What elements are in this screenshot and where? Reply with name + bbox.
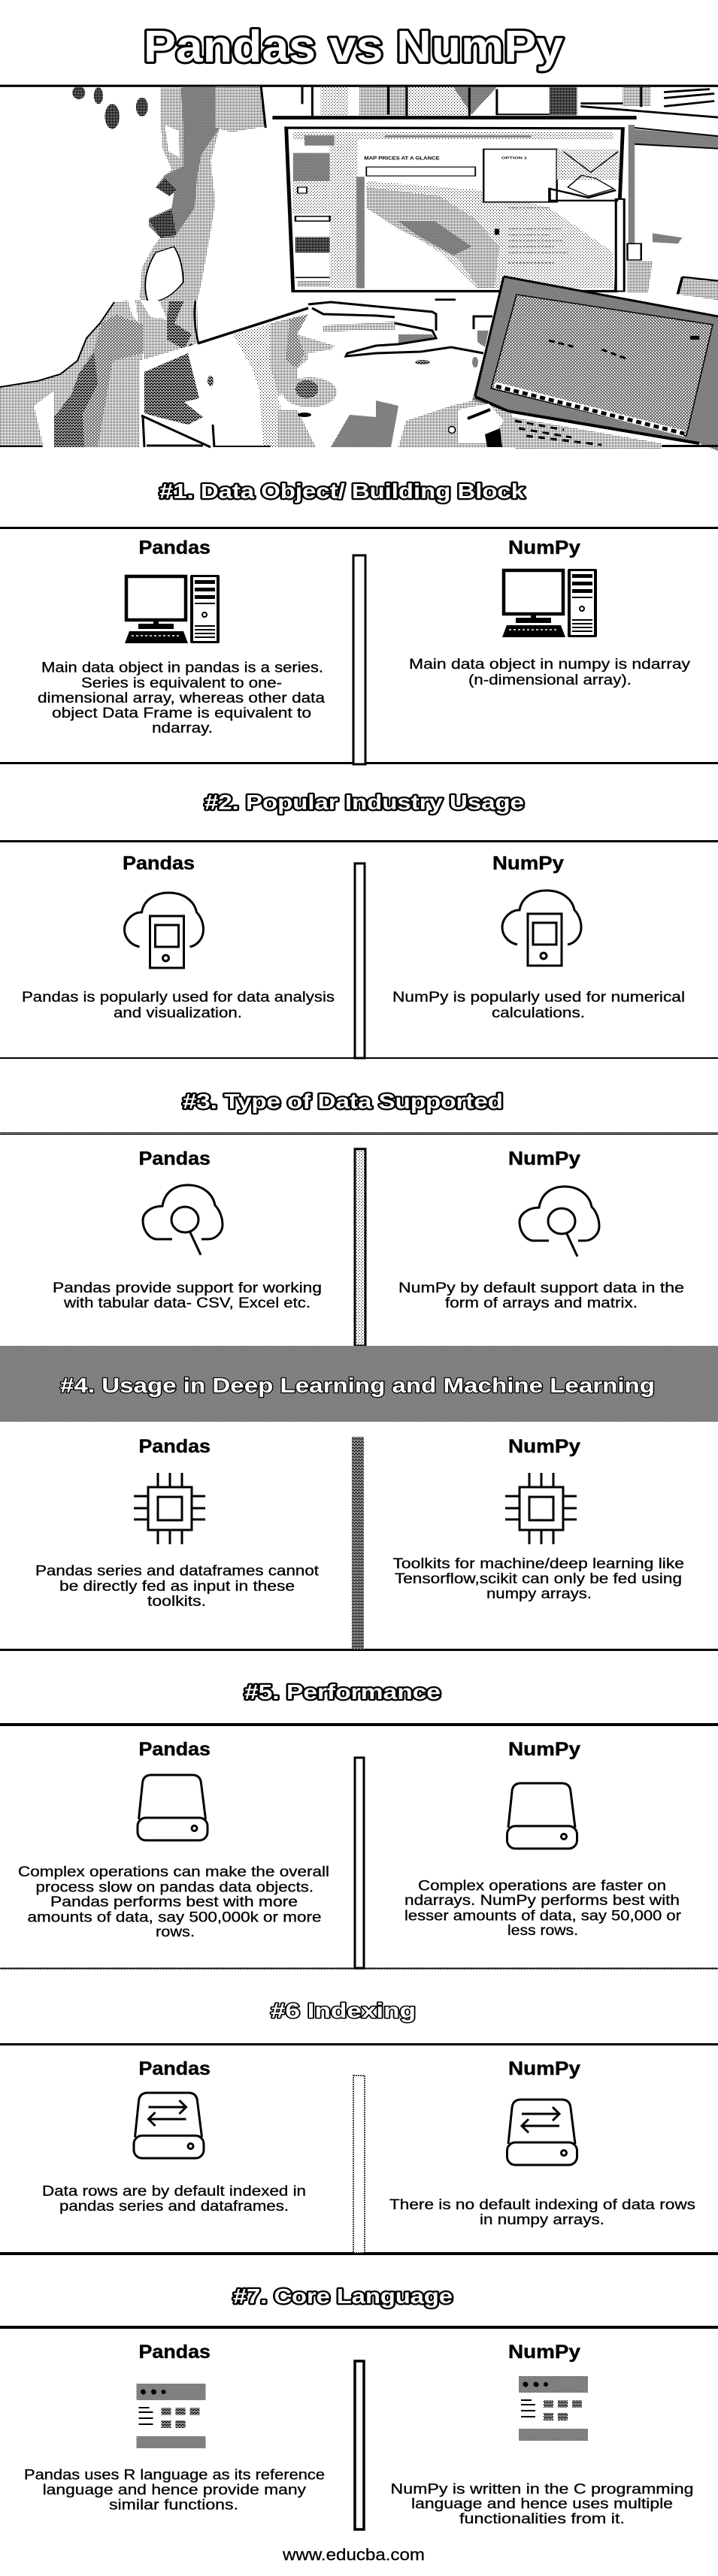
shelf items — [183, 86, 718, 132]
description: Series is equivalent to one- — [81, 676, 282, 691]
hand and keyboard — [0, 401, 718, 449]
description 7: Pandas uses R language as its reference — [24, 2467, 325, 2483]
description 2: and visualization. — [114, 1005, 242, 1021]
column: Pandas 6: Pandas — [138, 2058, 211, 2079]
icon: cloud phone — [125, 893, 203, 968]
column: NumPy 2 — [392, 853, 685, 1021]
column: NumPy 3: NumPy — [508, 1148, 580, 1169]
column: NumPy 5 — [404, 1739, 682, 1939]
description 7: language and hence provide many — [43, 2482, 307, 2498]
divider 3 — [355, 1149, 365, 1346]
photo lower half — [0, 277, 718, 451]
description: object Data Frame is equivalent to — [52, 706, 311, 721]
description 6 — [42, 2184, 306, 2215]
description 2 right: calculations. — [492, 1005, 585, 1021]
description 3 right: form of arrays and matrix. — [445, 1296, 638, 1311]
icon: computer — [125, 575, 220, 643]
column: NumPy 4 — [392, 1436, 684, 1602]
column: NumPy: NumPy — [508, 537, 580, 558]
monitor: MAP PRICES AT A GLANCE — [364, 156, 440, 161]
section 4: deep learning band and panel — [0, 1346, 718, 1651]
icon: drive right — [507, 1783, 577, 1849]
title: Pandas vs NumPy — [144, 22, 563, 71]
leaves — [72, 86, 148, 129]
description 2 — [22, 990, 335, 1021]
description 3 right: NumPy by default support data in the — [398, 1280, 684, 1296]
description 6 right — [389, 2197, 695, 2228]
section 7: core language — [0, 2284, 718, 2529]
column: Pandas 7 — [24, 2342, 325, 2513]
plant trunk — [140, 88, 220, 315]
section 3: type of data supported — [0, 1090, 718, 1346]
divider 7 — [355, 2361, 364, 2529]
column: NumPy 5: NumPy — [508, 1739, 580, 1760]
column: NumPy 6: NumPy — [508, 2058, 580, 2079]
description 7 right — [391, 2482, 693, 2527]
monitor: acer — [438, 300, 454, 305]
column: Pandas 3: Pandas — [138, 1148, 211, 1169]
icon: chip — [134, 1473, 205, 1544]
column: Pandas: Pandas — [138, 537, 211, 558]
description 4 right — [392, 1556, 684, 1602]
description 5 right: lesser amounts of data, say 50,000 or — [404, 1909, 682, 1924]
photo upper half — [0, 85, 718, 315]
icon: drive with arrows — [134, 2093, 204, 2158]
description 5 right: less rows. — [507, 1923, 578, 1939]
divider — [353, 555, 365, 764]
column: Pandas 2: Pandas — [123, 853, 195, 874]
heading 7: #7. Core Language — [233, 2284, 453, 2308]
description right: Main data object in numpy is ndarray — [409, 657, 691, 673]
description 7 right: language and hence uses multiple — [411, 2496, 673, 2512]
column: NumPy 3 — [398, 1148, 684, 1311]
description 6: pandas series and dataframes. — [59, 2199, 289, 2215]
divider 2 — [355, 863, 365, 1058]
icon: chip right — [505, 1473, 577, 1544]
column: NumPy 4: NumPy — [508, 1436, 580, 1457]
description 5: Pandas performs best with more — [50, 1894, 298, 1910]
description 3: with tabular data- CSV, Excel etc. — [63, 1296, 311, 1311]
footer url: www.educba.com — [282, 2545, 425, 2564]
description 5: Complex operations can make the overall — [18, 1864, 329, 1880]
section 2: popular industry usage — [0, 791, 718, 1059]
photo: desk with monitor and laptop — [0, 85, 718, 451]
column: Pandas 5: Pandas — [138, 1739, 211, 1760]
divider 6 — [353, 2076, 365, 2253]
description 3 — [53, 1280, 322, 1311]
column: Pandas 2 — [22, 853, 335, 1021]
icon: cloud search — [143, 1185, 223, 1255]
divider 5 — [355, 1758, 364, 1968]
description: Main data object in pandas is a series. — [41, 660, 323, 676]
description 5: rows. — [156, 1924, 195, 1940]
description: ndarray. — [152, 721, 213, 736]
icon: cloud search right — [520, 1187, 599, 1256]
monitor — [286, 128, 624, 306]
description 5 right — [404, 1879, 682, 1939]
icon: drive with arrows right — [507, 2100, 577, 2165]
heading 4: #4. Usage in Deep Learning and Machine Learning — [60, 1374, 655, 1397]
description 7 — [24, 2467, 325, 2513]
column: NumPy 6 — [389, 2058, 695, 2228]
icon: computer right — [502, 569, 597, 637]
description 2 right: NumPy is popularly used for numerical — [392, 990, 685, 1005]
description 4: Pandas series and dataframes cannot — [35, 1563, 320, 1580]
heading 2: #2. Popular Industry Usage — [204, 791, 524, 814]
description 7: similar functions. — [109, 2497, 238, 2513]
description 5 right: ndarrays. NumPy performs best with — [404, 1893, 680, 1909]
icon: app window — [137, 2384, 206, 2448]
description 4 right: numpy arrays. — [486, 1586, 592, 1602]
trunk base — [135, 301, 198, 367]
column: Pandas 4 — [35, 1436, 320, 1610]
description 4 right: Tensorflow,scikit can only be fed using — [395, 1571, 682, 1587]
laptop — [472, 277, 718, 451]
description 4 — [35, 1563, 320, 1610]
heading 1: #1. Data Object/ Building Block — [159, 479, 525, 503]
column: Pandas — [38, 537, 325, 736]
description 5: process slow on pandas data objects. — [36, 1880, 314, 1895]
description 4: be directly fed as input in these — [59, 1579, 295, 1595]
heading 3: #3. Type of Data Supported — [183, 1090, 503, 1113]
description 5 — [18, 1864, 329, 1940]
column: NumPy 7: NumPy — [508, 2342, 580, 2363]
description 4: toolkits. — [147, 1594, 206, 1610]
description 5 right: Complex operations are faster on — [418, 1879, 666, 1894]
description 6 right: in numpy arrays. — [480, 2212, 604, 2228]
description 3 right — [398, 1280, 684, 1311]
column: NumPy — [409, 537, 691, 688]
description 2: Pandas is popularly used for data analysis — [22, 990, 335, 1005]
description 6 right: There is no default indexing of data rows — [389, 2197, 695, 2213]
description: dimensional array, whereas other data — [38, 691, 325, 706]
description right — [409, 657, 691, 688]
column: Pandas 7: Pandas — [138, 2342, 211, 2363]
description 6: Data rows are by default indexed in — [42, 2184, 306, 2200]
column: Pandas 4: Pandas — [138, 1436, 211, 1457]
description 2 right — [392, 990, 685, 1021]
heading 5: #5. Performance — [244, 1680, 441, 1704]
description 4 right: Toolkits for machine/deep learning like — [392, 1556, 684, 1572]
section 5: performance — [0, 1680, 718, 1970]
icon: drive — [138, 1775, 208, 1840]
column: NumPy 2: NumPy — [492, 853, 564, 874]
description right: (n-dimensional array). — [468, 673, 632, 688]
section 1: data object — [0, 479, 718, 764]
lower left mound — [0, 301, 143, 447]
heading 6: #6 Indexing — [271, 1999, 416, 2022]
icon: app window right — [519, 2376, 588, 2441]
monitor: OPTION 1 — [501, 156, 528, 160]
icon: cloud phone right — [502, 890, 581, 966]
description 7 right: NumPy is written in the C programming — [391, 2482, 693, 2498]
section 6: indexing — [0, 1999, 718, 2255]
desk — [198, 302, 492, 447]
column: Pandas 3 — [53, 1148, 322, 1311]
description 7 right: functionalities from it. — [459, 2511, 625, 2527]
description 3: Pandas provide support for working — [53, 1280, 322, 1296]
band — [0, 1346, 718, 1422]
description 5: amounts of data, say 500,000k or more — [27, 1910, 322, 1925]
grey box — [140, 343, 218, 451]
column: NumPy 7 — [391, 2342, 693, 2527]
column: Pandas 6 — [42, 2058, 306, 2215]
description — [38, 660, 325, 736]
divider 4 — [352, 1437, 364, 1649]
column: Pandas 5 — [18, 1739, 329, 1940]
monitor right side — [627, 125, 718, 300]
